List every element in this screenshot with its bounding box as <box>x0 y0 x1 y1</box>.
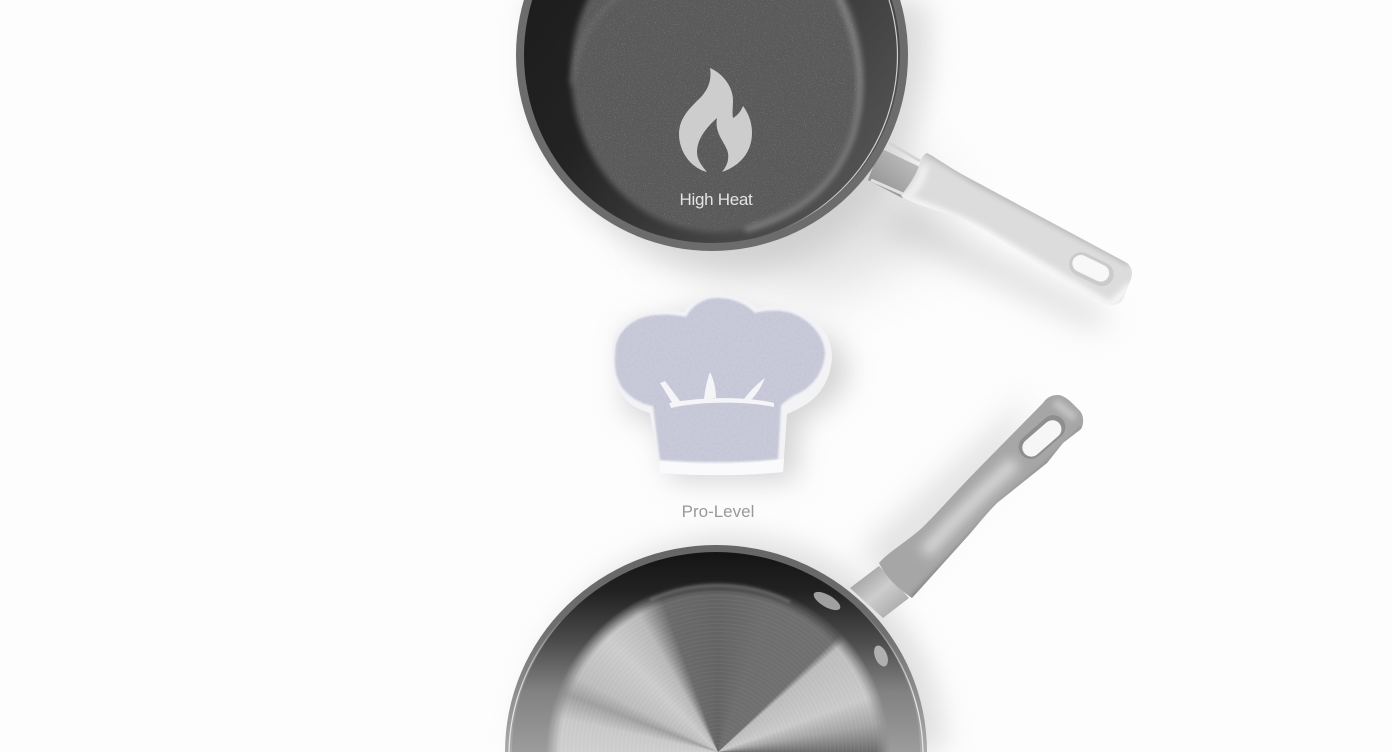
bottom pan handle <box>850 395 1085 618</box>
chef hat sponge <box>610 293 835 475</box>
hat band line and pleats <box>660 372 774 408</box>
white band <box>659 459 784 475</box>
floor edge highlight <box>650 586 790 602</box>
rivet lower <box>871 644 891 668</box>
handle grip <box>900 150 1132 306</box>
floor edge glint <box>745 0 860 230</box>
label: High Heat: High Heat <box>680 190 753 209</box>
inner wall <box>512 552 920 752</box>
handle bracket <box>868 148 922 198</box>
inner wall <box>524 0 900 243</box>
icon: flame <box>679 68 752 172</box>
outer rim <box>516 0 908 251</box>
hat body <box>612 295 832 475</box>
top pan: High Heat <box>516 0 1132 306</box>
handle hole <box>1065 248 1118 290</box>
illustration: two pans and chef hat <box>505 0 1132 752</box>
label: Pro-Level: Pro-Level <box>682 502 754 521</box>
cooking surface <box>571 0 863 233</box>
rivet upper <box>811 588 843 614</box>
outer rim <box>505 545 927 752</box>
brushed floor <box>540 574 896 752</box>
hat foam face <box>615 298 825 462</box>
surface speckle <box>574 0 860 230</box>
handle grip <box>879 395 1085 600</box>
rim highlights <box>509 610 923 752</box>
soft background shadows <box>520 0 1110 752</box>
top pan handle <box>868 143 1132 306</box>
handle ferrule <box>850 566 909 618</box>
foam texture <box>615 298 808 461</box>
handle hole <box>1014 410 1070 464</box>
bottom pan: stainless <box>505 395 1085 752</box>
rim highlight <box>763 0 897 236</box>
